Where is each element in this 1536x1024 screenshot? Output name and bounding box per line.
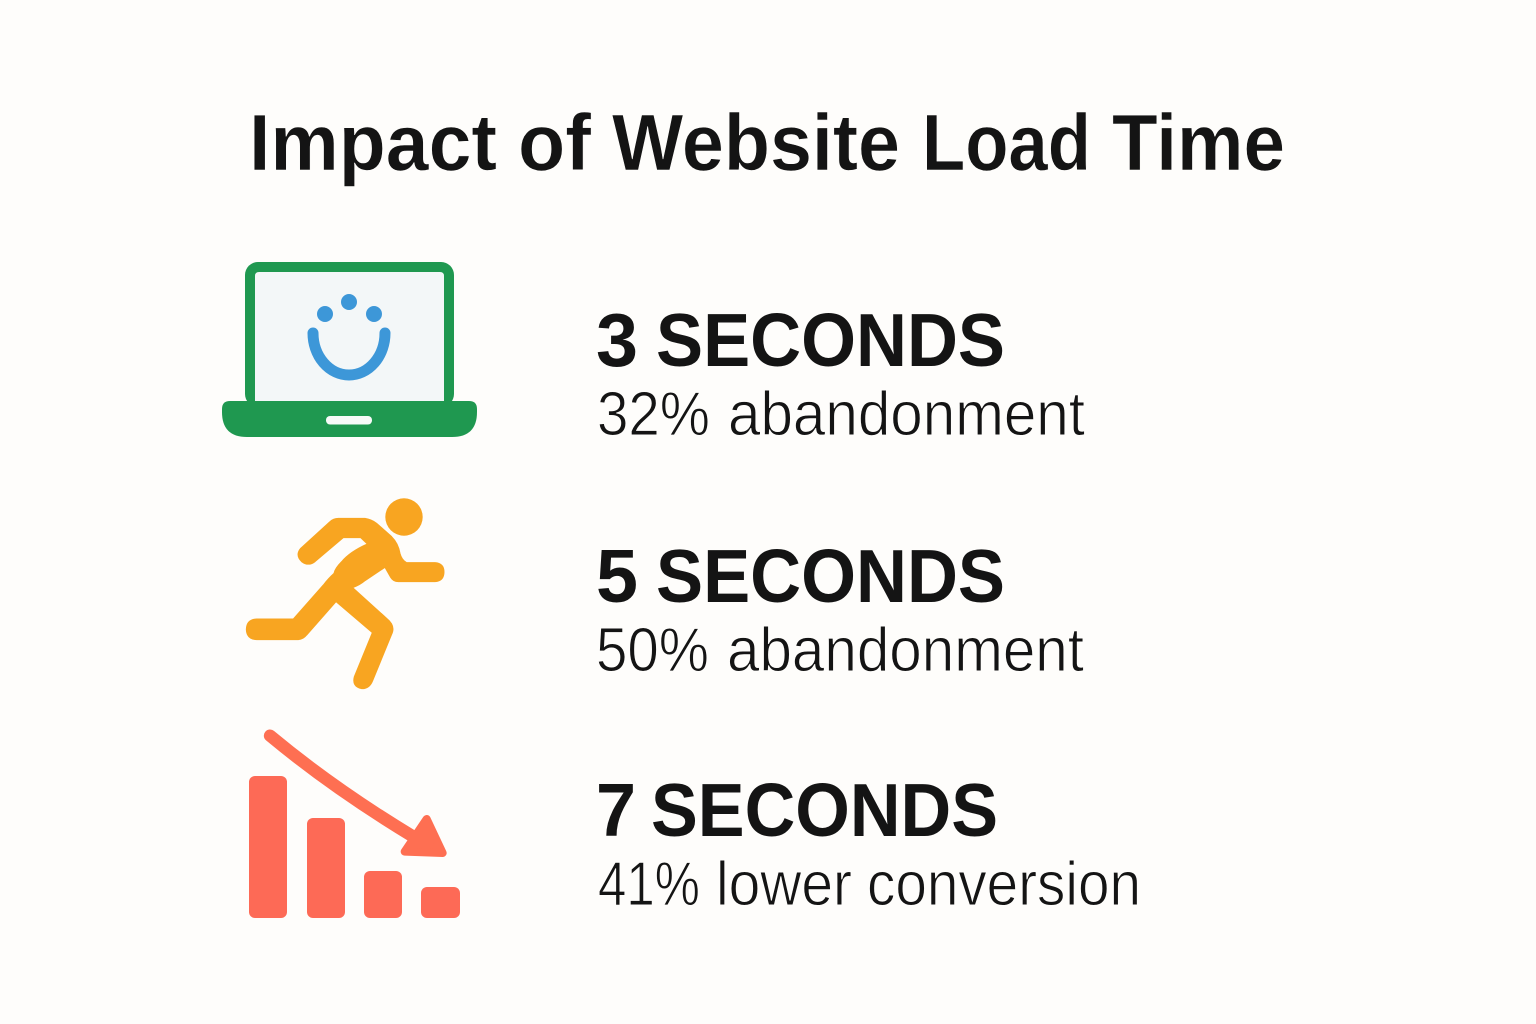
text: 5 seconds: SECONDS <box>656 534 1005 618</box>
title: Impact <box>249 98 497 187</box>
text: 7 seconds: conversion <box>867 850 1141 919</box>
title: Website <box>612 98 900 187</box>
text: 5 seconds: abandonment <box>727 616 1084 685</box>
text: 3 seconds: 32% <box>597 380 710 449</box>
title: Load <box>922 98 1091 187</box>
text: 7 seconds: 7 <box>596 768 636 852</box>
text: 3 seconds <box>596 298 1085 449</box>
text: 7 seconds <box>596 768 1141 919</box>
title: Time <box>1112 98 1285 187</box>
text: 7 seconds: lower <box>716 850 852 919</box>
icon: falling bar chart with arrow <box>249 736 460 918</box>
text: 3 seconds: 3 <box>596 298 638 382</box>
text: 7 seconds: 41% <box>598 850 700 919</box>
text: 5 seconds <box>596 534 1084 685</box>
text: 5 seconds: 50% <box>596 616 709 685</box>
text: 3 seconds: abandonment <box>728 380 1085 449</box>
icon: laptop with smile <box>222 262 477 437</box>
icon: running person <box>246 498 444 689</box>
text: 5 seconds: 5 <box>596 534 638 618</box>
title: of <box>518 98 591 187</box>
text: 7 seconds: SECONDS <box>651 768 998 852</box>
text: 3 seconds: SECONDS <box>656 298 1005 382</box>
